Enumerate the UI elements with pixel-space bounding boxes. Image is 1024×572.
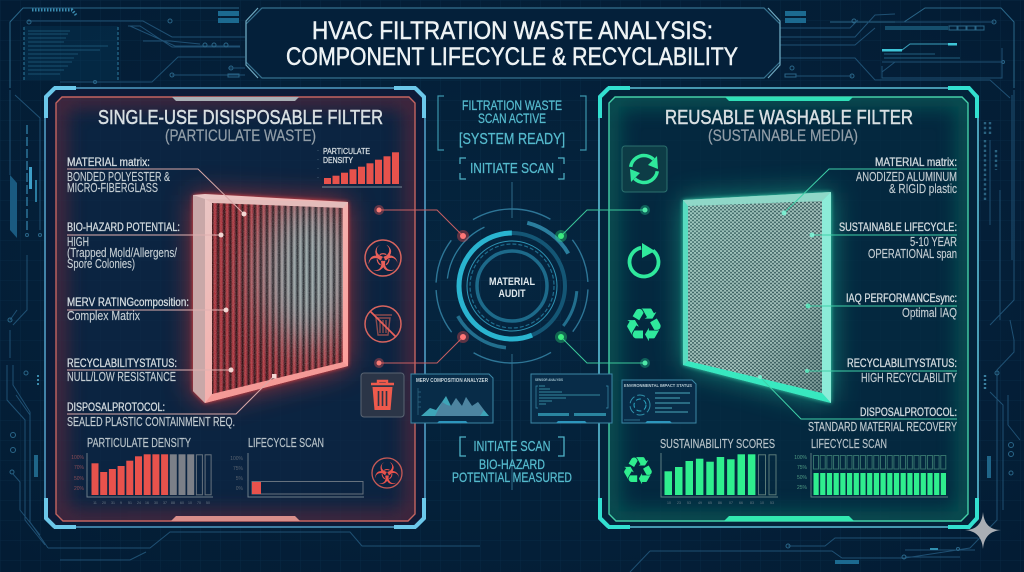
center readout: filtration waste scan: FILTRATION WASTE bbox=[462, 98, 562, 113]
chart: sustainability scores: 07 bbox=[729, 501, 733, 505]
center readout: filtration waste scan: SCAN ACTIVE bbox=[478, 111, 546, 126]
top tab right bbox=[725, 97, 853, 101]
circuit decoration: top right bbox=[780, 8, 1014, 98]
button: initiate scan top: INITIATE SCAN bbox=[470, 160, 554, 177]
label: sustainable lifecycle: OPERATIONAL span bbox=[868, 247, 957, 261]
chart: sustainability scores: SUSTAINABILITY SCORES bbox=[660, 436, 775, 451]
chart: particulate density: 37 bbox=[163, 501, 167, 505]
label: iaq performance: Optimal IAQ bbox=[902, 306, 957, 320]
label: bio-hazard potential bbox=[67, 220, 224, 271]
center readout: filtration waste scan bbox=[438, 96, 586, 150]
label: recyclability status: NULL/LOW RESISTANCE bbox=[67, 370, 176, 384]
icon: trash box bbox=[361, 373, 404, 417]
chart: lifecycle scan: LIFECYCLE SCAN bbox=[811, 436, 887, 451]
label: disposal protocol bbox=[67, 374, 276, 429]
mini panel: environmental impact status: ENVIRONMENTAL IMPACT STATUS bbox=[624, 383, 693, 389]
label: material matrix: & RIGID plastic bbox=[889, 182, 957, 196]
button: initiate scan top bbox=[460, 158, 564, 179]
icon: biohazard small: ☣ bbox=[374, 457, 400, 492]
label: disposal protocol: SEALED PLASTIC CONTAINMENT REQ. bbox=[67, 415, 235, 429]
chart: particulate density: 11 bbox=[93, 501, 97, 505]
label: material matrix: MICRO-FIBERGLASS bbox=[67, 181, 158, 195]
label: sustainable lifecycle: 5-10 YEAR bbox=[910, 235, 957, 249]
chart: particulate density: 9 bbox=[120, 501, 122, 505]
mini panel: merv composition analyzer: MERV COMPOSITION ANALYZER bbox=[416, 378, 488, 384]
chart: lifecycle scan: 5% bbox=[236, 476, 244, 482]
chart: particulate density: 10 bbox=[188, 501, 192, 505]
chart: particulate density bbox=[71, 435, 213, 505]
label: recyclability status: RECYCLABILITYSTATUS: bbox=[847, 356, 957, 370]
chart: particulate density: 51 bbox=[128, 501, 132, 505]
label: bio-hazard potential: HIGH bbox=[67, 235, 89, 249]
chart: particulate density: 30 bbox=[154, 501, 158, 505]
chart: particulate density: 100% bbox=[71, 455, 85, 461]
label: iaq performance: IAQ PERFORMANCEsync: bbox=[846, 291, 957, 305]
title frame bbox=[246, 8, 780, 78]
chart: particulate density: 20 bbox=[102, 501, 106, 505]
button: initiate scan bottom bbox=[460, 437, 564, 456]
inner panel right bbox=[609, 97, 968, 521]
mini panel: sensor readout bbox=[531, 374, 612, 423]
label: recyclability status bbox=[67, 356, 234, 384]
label: material matrix: ANODIZED ALUMINUM bbox=[856, 170, 957, 184]
connectors to center dial bbox=[374, 182, 650, 490]
chart: sustainability scores: 10 bbox=[667, 501, 671, 505]
label: bio-hazard potential: BIO-HAZARD POTENTIAL: bbox=[67, 220, 180, 234]
dial label: MATERIAL bbox=[489, 276, 535, 288]
bottom tab left bbox=[171, 516, 300, 521]
icon: recycling small: ♻ bbox=[621, 449, 655, 493]
title line 1: HVAC FILTRATION WASTE ANALYSIS: bbox=[312, 17, 713, 45]
chart: particulate density: 24 bbox=[137, 501, 141, 505]
label: material matrix: MATERIAL matrix: bbox=[67, 155, 150, 169]
center readout: filtration waste scan: [SYSTEM READY] bbox=[459, 131, 565, 148]
icon: biohazard: ☣ bbox=[367, 239, 399, 280]
panel: single-use filter bbox=[45, 88, 425, 527]
chart: particulate density: 31 bbox=[111, 501, 115, 505]
chart: lifecycle scan bbox=[794, 436, 948, 497]
chart: lifecycle scan: 50% bbox=[797, 475, 808, 481]
label: material matrix: MATERIAL matrix: bbox=[875, 155, 957, 169]
readout: bio-hazard potential measured: BIO-HAZARD bbox=[479, 456, 545, 472]
inner panel left bbox=[56, 97, 415, 521]
label: sustainable lifecycle: SUSTAINABLE LIFECYCLE: bbox=[839, 220, 957, 234]
chart: lifecycle scan: 0% bbox=[236, 486, 244, 492]
corner accents left bbox=[46, 88, 424, 527]
outer frame left bbox=[45, 88, 425, 527]
filter: red pleated bbox=[193, 194, 348, 403]
label: material matrix bbox=[67, 155, 246, 216]
chart: lifecycle scan: 75% bbox=[797, 465, 808, 471]
label: recyclability status: HIGH RECYCLABILITY bbox=[861, 371, 957, 385]
mini bar chart: particulate density: DENSITY bbox=[323, 155, 353, 165]
chart: sustainability scores bbox=[660, 436, 778, 505]
circuit decoration: top left bbox=[10, 8, 245, 88]
mini panel: sensor readout: SENSOR ANALYSIS bbox=[535, 378, 563, 382]
icon: sync box bbox=[622, 146, 667, 192]
label: iaq performance bbox=[806, 291, 957, 320]
title line 2: COMPONENT LIFECYCLE & RECYCLABILITY bbox=[286, 43, 738, 71]
label: merv rating: Complex Matrix bbox=[67, 309, 141, 323]
chart: particulate density: 88 bbox=[171, 501, 175, 505]
chart: sustainability scores: 66 bbox=[739, 501, 743, 505]
label: material matrix bbox=[782, 155, 957, 216]
label: bio-hazard potential: (Trapped Mold/Allergens/ bbox=[67, 246, 177, 260]
icon: no trash bbox=[365, 306, 401, 342]
panel: reusable filter bbox=[599, 88, 978, 527]
chart: lifecycle scan: 75% bbox=[233, 466, 244, 472]
chart: particulate density: 20% bbox=[74, 486, 85, 492]
dial label: AUDIT bbox=[498, 288, 526, 300]
side circuits: left bbox=[7, 90, 480, 560]
filter: washable mesh bbox=[683, 192, 831, 403]
label: bio-hazard potential: Spore Colonies) bbox=[67, 257, 135, 271]
dial label bbox=[489, 276, 535, 300]
subheading: (PARTICULATE WASTE) bbox=[165, 126, 316, 145]
chart: sustainability scores: 23 bbox=[677, 501, 681, 505]
chart: particulate density: 50 bbox=[206, 501, 210, 505]
label: disposal protocol: DISPOSALPROTOCOL: bbox=[860, 405, 957, 419]
heading: SINGLE-USE DISISPOSABLE FILTER bbox=[98, 106, 383, 129]
label: recyclability status: RECYCLABILITYSTATUS: bbox=[67, 356, 177, 370]
icon: recycling: ♻ bbox=[623, 298, 665, 352]
chart: particulate density: 50% bbox=[74, 476, 85, 482]
chart: lifecycle scan: 25% bbox=[797, 485, 808, 491]
chart: sustainability scores: 53 bbox=[687, 501, 691, 505]
chart: sustainability scores: 86 bbox=[718, 501, 722, 505]
label: merv rating: MERV RATINGcomposition: bbox=[67, 295, 189, 309]
label: material matrix: BONDED POLYESTER & bbox=[67, 170, 170, 184]
chart: lifecycle scan: 100% bbox=[794, 455, 808, 461]
chart: lifecycle scan: 100% bbox=[230, 456, 244, 462]
chart: lifecycle scan: LIFECYCLE SCAN bbox=[248, 435, 324, 450]
chart: particulate density: 16 bbox=[145, 501, 149, 505]
side circuits: right bbox=[630, 90, 1020, 572]
mini panel: environmental impact status bbox=[622, 380, 696, 423]
label: sustainable lifecycle bbox=[810, 220, 957, 261]
readout: bio-hazard potential measured: POTENTIAL MEASURED bbox=[452, 469, 572, 485]
label: disposal protocol: STANDARD MATERIAL RECOVERY bbox=[808, 420, 957, 434]
chart: sustainability scores: 65 bbox=[708, 501, 712, 505]
center dial: material audit bbox=[406, 180, 618, 392]
chart: particulate density: 70% bbox=[74, 465, 85, 471]
subheading: (SUSTAINABLE MEDIA) bbox=[708, 126, 858, 145]
icon: recycle arrow bbox=[624, 242, 664, 282]
chart: lifecycle scan bbox=[230, 435, 364, 497]
mini panel: merv composition analyzer bbox=[411, 374, 493, 423]
mini bar chart: particulate density: PARTICULATE bbox=[323, 146, 370, 156]
bottom tab right bbox=[724, 516, 854, 521]
mini bar chart: particulate density bbox=[318, 146, 402, 187]
label: recyclability status bbox=[805, 356, 957, 385]
heading: REUSABLE WASHABLE FILTER bbox=[665, 106, 913, 129]
chart: sustainability scores: 49 bbox=[698, 501, 702, 505]
button: initiate scan bottom: INITIATE SCAN bbox=[474, 438, 550, 455]
icon: sparkle watermark bbox=[965, 512, 1001, 549]
readout: bio-hazard potential measured bbox=[452, 456, 572, 485]
chart: sustainability scores: 10 bbox=[760, 501, 764, 505]
chart: sustainability scores: 53 bbox=[770, 501, 774, 505]
label: disposal protocol bbox=[758, 375, 957, 434]
label: merv rating bbox=[67, 295, 228, 323]
outer frame right bbox=[599, 88, 978, 527]
chart: particulate density: 70 bbox=[197, 501, 201, 505]
label: disposal protocol: DISPOSALPROTOCOL: bbox=[67, 400, 165, 414]
chart: particulate density: PARTICULATE DENSITY bbox=[87, 435, 191, 450]
chart: sustainability scores: 83 bbox=[750, 501, 754, 505]
chart: particulate density: 60 bbox=[180, 501, 184, 505]
top tab left bbox=[172, 97, 299, 101]
corner accents right bbox=[600, 88, 977, 527]
